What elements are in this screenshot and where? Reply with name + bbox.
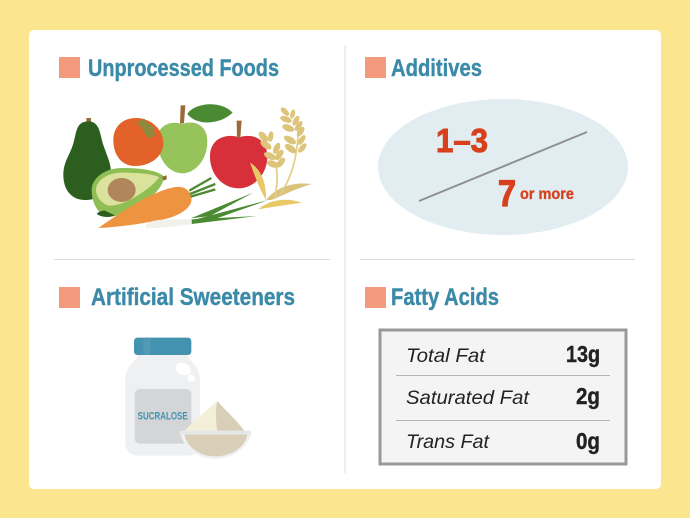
nutrition facts table: 2g bbox=[576, 383, 600, 409]
panel: Additives bbox=[365, 55, 628, 235]
nutrition facts table: Total Fat bbox=[406, 346, 486, 367]
nutrition facts table: 13g bbox=[566, 341, 600, 367]
ellipse diagram bbox=[378, 99, 628, 235]
nutrition facts table: Saturated Fat bbox=[406, 388, 530, 409]
nutrition facts table: 0g bbox=[576, 428, 600, 454]
heading: Additives bbox=[365, 55, 482, 82]
nutrition facts table bbox=[380, 330, 626, 464]
panel: Unprocessed Foods bbox=[59, 55, 312, 228]
ellipse diagram: 1–3 bbox=[436, 122, 488, 159]
illustration: fruits and vegetables bbox=[63, 104, 312, 228]
ellipse diagram: or more bbox=[520, 186, 574, 203]
ellipse diagram: 7 bbox=[498, 173, 516, 214]
illustration: sucralose jar and powder bowl bbox=[125, 338, 251, 459]
heading: Artificial Sweeteners: Artificial Sweeteners bbox=[91, 284, 295, 311]
heading: Fatty Acids: Fatty Acids bbox=[391, 284, 499, 311]
panel: Artificial Sweeteners bbox=[59, 284, 295, 459]
panel: Fatty Acids bbox=[365, 284, 626, 464]
heading: Unprocessed Foods: Unprocessed Foods bbox=[88, 55, 279, 82]
heading: Fatty Acids bbox=[365, 284, 499, 311]
nutrition facts table: Trans Fat bbox=[406, 432, 490, 453]
heading: Additives: Additives bbox=[391, 55, 482, 82]
illustration: sucralose jar and powder bowl: SUCRALOSE bbox=[138, 411, 188, 423]
